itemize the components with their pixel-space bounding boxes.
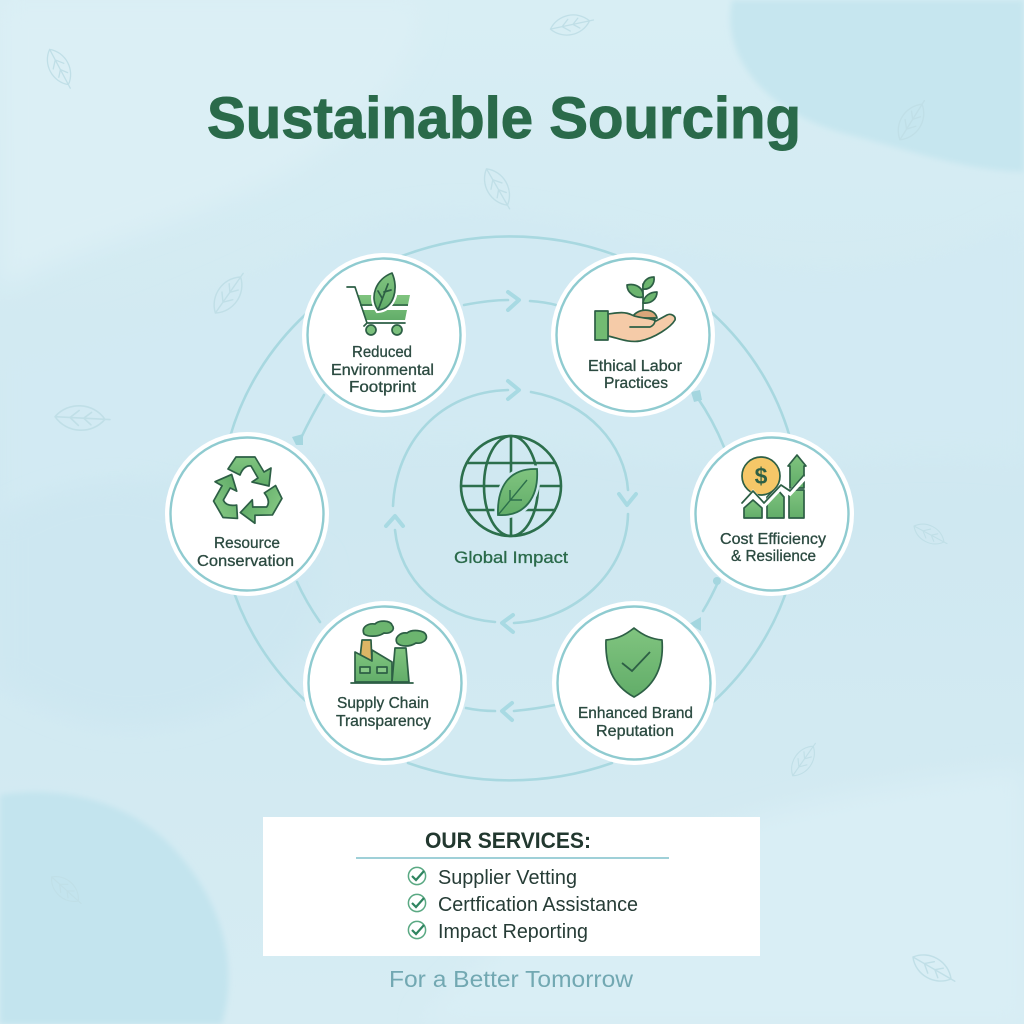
- label: Global Impact: [454, 548, 568, 567]
- label: [331, 344, 434, 396]
- panel: our services: [263, 817, 760, 956]
- icon: recycling arrows: [206, 457, 286, 529]
- label: Conservation: [197, 553, 294, 570]
- label: Transparency: [336, 713, 431, 730]
- icon: shopping cart with leaf: [347, 273, 410, 335]
- service: certification assistance: Certfication Assistance: [438, 894, 638, 916]
- heading: OUR SERVICES:: [425, 828, 591, 853]
- label: Ethical Labor: [588, 358, 682, 375]
- label: & Resilience: [731, 548, 816, 565]
- icon: coin and rising chart: [742, 455, 806, 518]
- label: Cost Efficiency: [720, 531, 826, 548]
- inner ring with arrows: [386, 381, 636, 632]
- label: [336, 695, 431, 730]
- node: enhanced brand reputation: [552, 601, 716, 765]
- icon: coin and rising chart: $: [755, 463, 768, 489]
- service: supplier vetting: Supplier Vetting: [438, 867, 577, 889]
- node: reduced environmental footprint: [302, 253, 466, 417]
- label: [578, 705, 693, 740]
- middle ring with arrows: [292, 292, 724, 720]
- label: Supply Chain: [337, 695, 429, 712]
- icon: globe with leaf: [461, 436, 561, 536]
- icon: factory with clouds: [351, 621, 426, 683]
- label: Environmental: [331, 362, 434, 379]
- label: Resource: [214, 535, 280, 552]
- label: [720, 531, 826, 565]
- node: resource conservation: [165, 432, 329, 596]
- label: Practices: [604, 375, 668, 392]
- label: [588, 358, 682, 392]
- node: cost efficiency and resilience: [690, 432, 854, 596]
- outer ring: [230, 236, 792, 780]
- label: Enhanced Brand: [578, 705, 693, 722]
- icon: shield with check: [606, 628, 662, 697]
- label: Footprint: [349, 379, 417, 396]
- label: Reduced: [352, 344, 412, 361]
- node: supply chain transparency: [303, 601, 467, 765]
- center: global impact: [454, 436, 568, 567]
- label: Reputation: [596, 723, 674, 740]
- icon: hand holding plant: [595, 277, 675, 341]
- label: [197, 535, 294, 570]
- tagline: For a Better Tomorrow: [389, 966, 633, 992]
- service: impact reporting: Impact Reporting: [438, 921, 588, 943]
- title: Sustainable Sourcing: [207, 86, 801, 151]
- node: ethical labor practices: [551, 253, 715, 417]
